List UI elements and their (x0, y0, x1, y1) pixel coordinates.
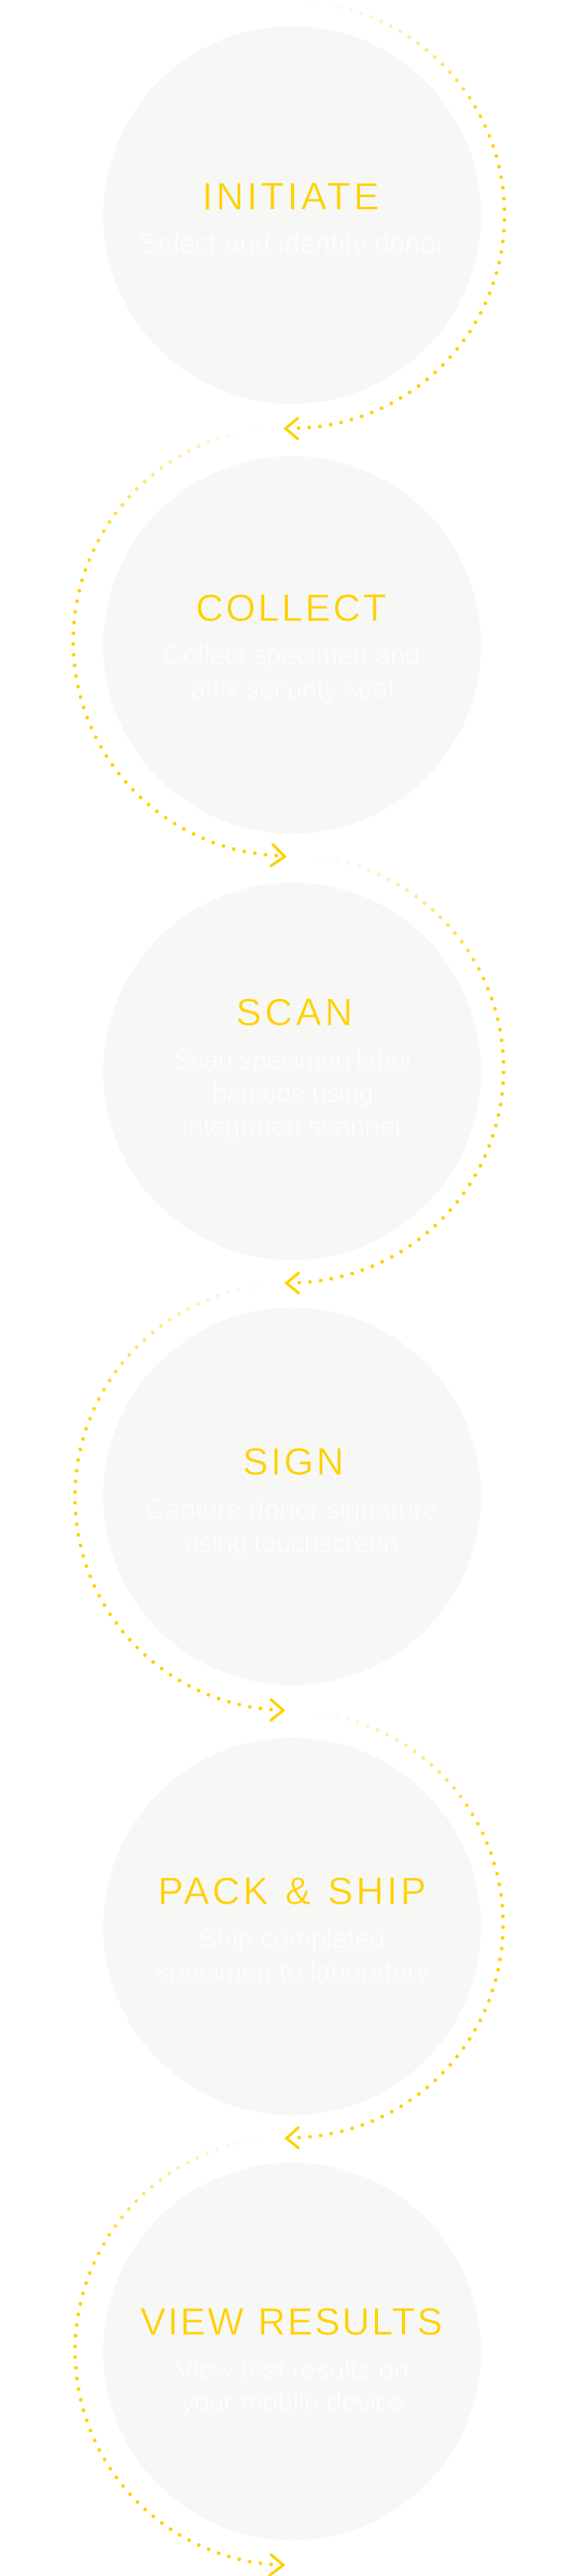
description: collect (164, 639, 420, 704)
step 2: collect (104, 456, 482, 833)
description: scan: Scan specimen label (173, 1045, 411, 1076)
heading: COLLECT: COLLECT (196, 586, 386, 629)
description: pack and ship: Ship completed (199, 1923, 385, 1954)
arrow: pack and ship to view results (286, 1711, 503, 2148)
arrow: collect to scan (74, 428, 285, 866)
step 4: sign (104, 1307, 482, 1685)
circle: view results (104, 2162, 482, 2540)
step 6: view results (104, 2162, 482, 2540)
description: view results (176, 2354, 409, 2417)
circle: collect (104, 456, 482, 833)
description: pack and ship (156, 1923, 430, 1987)
circle: scan (104, 883, 482, 1261)
circle: pack and ship (104, 1737, 482, 2115)
heading: VIEW RESULTS: VIEW RESULTS (140, 2300, 442, 2343)
description: scan (173, 1045, 411, 1141)
description: view results: View test results on (176, 2354, 409, 2385)
description: collect: affix security seal (190, 673, 394, 704)
step 3: scan (104, 883, 482, 1261)
heading: SIGN: SIGN (243, 1440, 344, 1482)
heading: PACK & SHIP: PACK & SHIP (158, 1869, 426, 1912)
arrow: sign to pack and ship (75, 1285, 284, 1720)
arrow: scan to sign (286, 855, 503, 1293)
description: sign (146, 1494, 437, 1558)
step 1: initiate (104, 26, 482, 404)
heading: SCAN: SCAN (236, 991, 352, 1034)
description: sign: using touchscreen (184, 1527, 398, 1558)
description: scan: integrated scanner (182, 1111, 404, 1141)
description: scan: barcode using (212, 1078, 374, 1108)
arrow: initiate to collect (286, 1, 505, 438)
description: initiate: Select and identify donor (140, 228, 445, 259)
description: sign: Capture donor signature (146, 1494, 437, 1524)
circle: sign (104, 1307, 482, 1685)
heading: INITIATE: INITIATE (202, 175, 380, 217)
step 5: pack and ship (104, 1737, 482, 2115)
arrow: view results exit (75, 2138, 284, 2575)
description: collect: Collect specimen and (164, 639, 420, 670)
description: pack and ship: specimen to laboratory (156, 1956, 430, 1987)
description: view results: your mobile device (181, 2386, 404, 2417)
circle: initiate (104, 26, 482, 404)
